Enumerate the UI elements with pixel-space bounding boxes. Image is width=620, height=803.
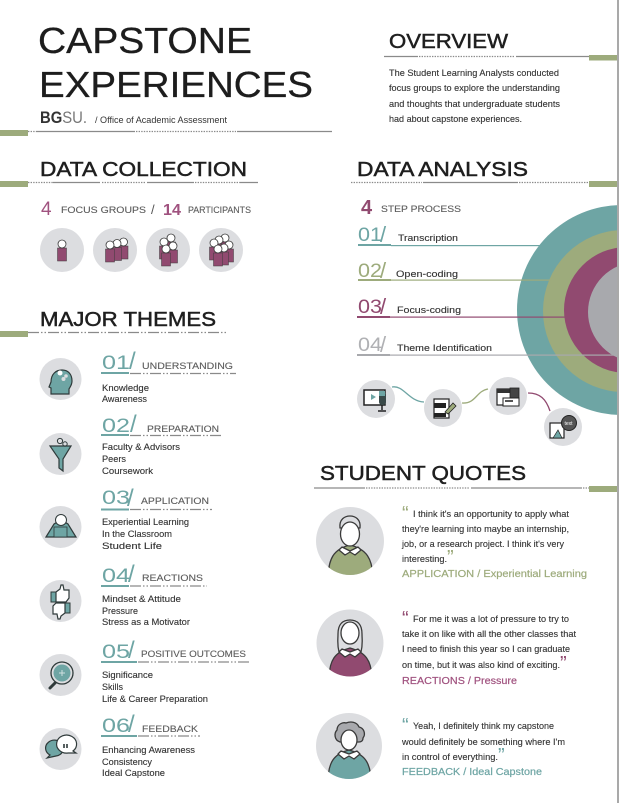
theme 03: Experiential Learning [102, 517, 189, 527]
overview text: The Student Learning Analysts conducted [389, 68, 559, 78]
theme 05 [40, 637, 249, 704]
quote 3 text: in control of everything. [402, 752, 498, 762]
theme 02: / [130, 411, 137, 438]
title: CAPSTONE [38, 20, 252, 61]
focus group stats: PARTICIPANTS [188, 205, 251, 216]
step 03: / [380, 294, 387, 319]
step 02 [358, 258, 551, 283]
theme 03: APPLICATION [141, 496, 209, 507]
theme 04: Stress as a Motivator [102, 617, 190, 627]
step 03: 03 [358, 297, 382, 318]
overview text: focus groups to explore the understanding [389, 83, 560, 93]
title: EXPERIENCES [39, 64, 313, 105]
theme 03: Student Life [102, 541, 162, 551]
focus group stats: 4 [41, 199, 52, 220]
avatar: man in green [316, 507, 384, 580]
theme 03 [40, 485, 212, 551]
concentric circles chart [517, 205, 620, 415]
overview text: had about capstone experiences. [389, 114, 522, 124]
focus group stats: / [151, 202, 155, 217]
theme 04: REACTIONS [142, 573, 203, 584]
step 01: / [380, 222, 387, 247]
icon: head with gears [40, 358, 82, 400]
theme 06: 06 [102, 716, 130, 737]
theme 02: 02 [102, 416, 130, 437]
icon: person at desk [40, 506, 82, 548]
quote 2 text: “ [402, 608, 409, 630]
data analysis heading: DATA ANALYSIS [357, 158, 528, 181]
theme 01: 01 [102, 353, 130, 374]
theme 03: / [127, 485, 134, 512]
theme 02 [40, 411, 222, 476]
icon: one person [40, 228, 84, 272]
quote 3 tag: FEEDBACK / Ideal Capstone [402, 767, 542, 778]
quote 3 text: “ [402, 715, 409, 737]
icon: six people [199, 228, 243, 272]
step 02: Open-coding [396, 269, 458, 279]
quote 3 [316, 713, 565, 782]
panel: data analysis [351, 158, 620, 446]
overview heading: OVERVIEW [389, 30, 509, 53]
icon: theme chat: text [564, 421, 573, 427]
step process label [361, 197, 461, 219]
theme 05: Significance [102, 670, 153, 680]
icon: funnel [40, 433, 82, 475]
theme 05: POSITIVE OUTCOMES [141, 649, 246, 660]
theme 05: Skills [102, 682, 123, 692]
theme 01: / [129, 348, 136, 375]
step 01: Transcription [398, 233, 458, 243]
focus group stats: 14 [163, 202, 181, 219]
focus group stats: FOCUS GROUPS [61, 205, 146, 216]
theme 04: 04 [102, 566, 131, 587]
panel: student quotes [314, 462, 617, 782]
theme 02: Coursework [102, 466, 154, 476]
theme 04 [40, 561, 207, 627]
step 04: 04 [358, 335, 382, 356]
BGSU office line: BGSU. [40, 108, 87, 127]
icon: theme chat [544, 408, 582, 446]
title [38, 20, 313, 105]
theme 04: Mindset & Attitude [102, 594, 181, 604]
overview text [389, 68, 560, 124]
quote 3 text: Yeah, I definitely think my capstone [413, 721, 554, 731]
theme 05: / [128, 637, 135, 664]
icon: document and pencil [424, 389, 462, 427]
quote 1 tag: APPLICATION / Experiential Learning [402, 569, 587, 580]
step process label: 4 [361, 197, 373, 219]
avatar: curly hair in teal [316, 713, 382, 782]
step 01: 01 [358, 225, 382, 246]
step 02: 02 [358, 261, 382, 282]
step 04: Theme Identification [397, 343, 492, 353]
quote 1 text: job, or a research project. I think it's very [401, 539, 564, 549]
quote 3 text: would definitely be something where I'm [401, 737, 565, 747]
quote 2 text: on time, but it was also kind of exciting. [402, 660, 560, 670]
quote 2 text: ” [560, 653, 567, 675]
focus group stats [41, 199, 251, 220]
avatar: woman in magenta [316, 610, 384, 680]
theme 04: / [128, 561, 135, 588]
theme 06: / [128, 711, 135, 738]
BGSU office line [40, 108, 227, 127]
theme 06: Enhancing Awareness [102, 745, 196, 755]
icon: five people [146, 228, 190, 272]
overview text: and thoughts that undergraduate students [389, 99, 560, 109]
step process label: STEP PROCESS [381, 204, 461, 215]
icon: video transcription [357, 380, 395, 418]
theme 05: Life & Career Preparation [102, 694, 208, 704]
quote 1 text: “ [402, 503, 409, 525]
quote 1 text: ” [447, 547, 454, 569]
icon: thumbs up and down [40, 580, 82, 622]
step 01 [358, 222, 543, 247]
theme 06: Consistency [102, 757, 152, 767]
quote 3 text: ” [498, 745, 505, 767]
quote 3 text [401, 715, 565, 767]
theme 02: Peers [102, 454, 127, 464]
quote 1 text: interesting. [402, 554, 447, 564]
quote 1 text [401, 503, 570, 569]
theme 06: FEEDBACK [142, 724, 199, 735]
step 03: Focus-coding [397, 305, 461, 315]
icon: speech bubbles [40, 728, 82, 770]
quote 2 [316, 608, 577, 687]
theme 05: 05 [102, 642, 130, 663]
icon: stacked documents [489, 377, 527, 415]
quote 2 tag: REACTIONS / Pressure [402, 676, 517, 687]
theme 06 [40, 711, 200, 778]
theme 03: 03 [102, 488, 130, 509]
theme 04: Pressure [102, 606, 138, 616]
quote 1 text: they're learning into maybe an internship, [402, 524, 569, 534]
theme 01: Awareness [102, 394, 148, 404]
panel: overview [384, 30, 617, 124]
step 04: / [380, 332, 387, 357]
theme 02: PREPARATION [147, 424, 219, 435]
panel: data collection [0, 158, 258, 272]
BGSU office line: / Office of Academic Assessment [95, 115, 227, 125]
step 03 [357, 294, 565, 319]
student quotes heading: STUDENT QUOTES [320, 462, 526, 485]
data collection heading: DATA COLLECTION [40, 158, 247, 181]
theme 01: Knowledge [102, 383, 149, 393]
theme 01: UNDERSTANDING [142, 361, 233, 372]
header rule [0, 130, 332, 136]
quote 2 text: For me it was a lot of pressure to try to [413, 614, 569, 624]
icon: magnifying glass [40, 654, 82, 696]
icon: three people [93, 228, 137, 272]
process connectors [392, 387, 550, 411]
theme 03: In the Classroom [102, 529, 172, 539]
quote 2 text: take it on like with all the other classes that [402, 629, 577, 639]
quote 1 [316, 503, 587, 580]
step 02: / [380, 258, 387, 283]
theme 01 [40, 348, 236, 404]
step 04 [357, 332, 618, 357]
quote 1 text: I think it's an opportunity to apply what [413, 509, 570, 519]
theme 06: Ideal Capstone [102, 768, 165, 778]
quote 2 text: I need to finish this year so I can graduate [402, 644, 570, 654]
quote 2 text [402, 608, 577, 675]
theme 02: Faculty & Advisors [102, 442, 181, 452]
panel: major themes [0, 308, 249, 778]
major themes heading: MAJOR THEMES [40, 308, 216, 331]
